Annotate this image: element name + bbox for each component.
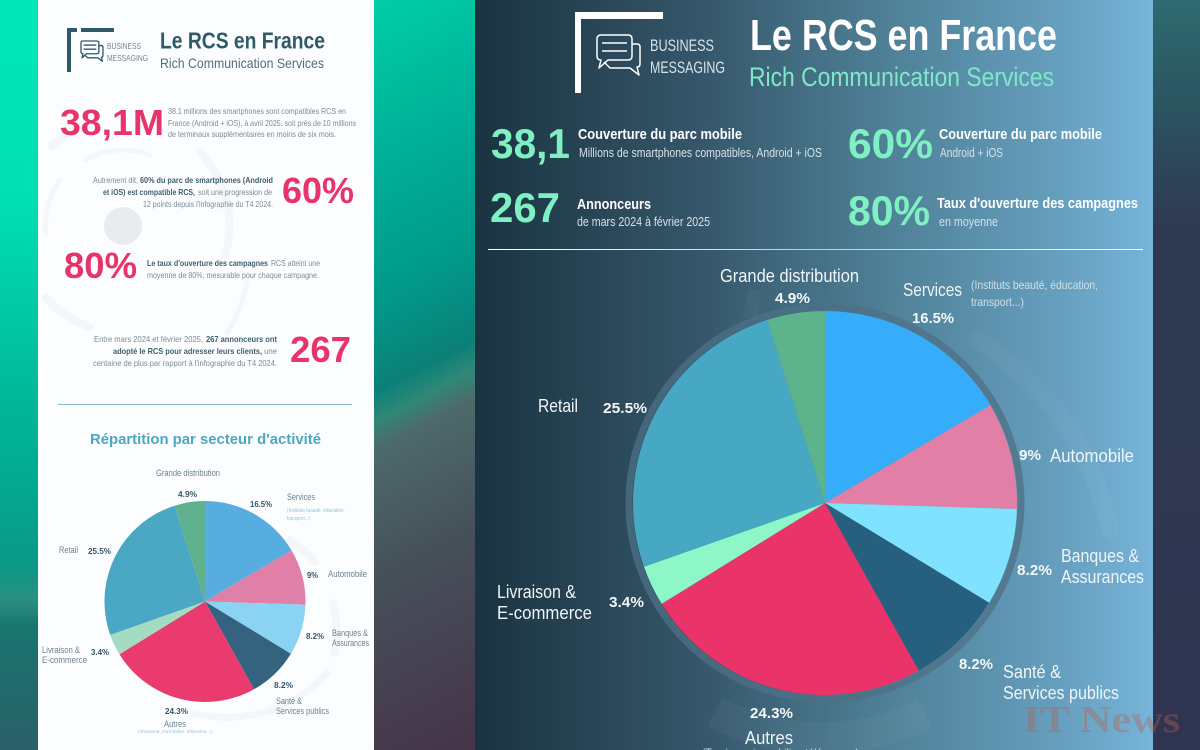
pie labels: dark version: 4.9% — [775, 290, 810, 307]
stat: 38,1M — [60, 102, 356, 143]
pie labels: dark version: Livraison & — [497, 582, 576, 602]
pie labels: light version: Automobile — [328, 569, 367, 579]
stat: 267: adopté le RCS pour adresser leurs clients, — [113, 347, 262, 356]
pie labels: light version: 25.5% — [88, 547, 111, 556]
pie labels: dark version: 9% — [1019, 447, 1041, 464]
pie labels: light version: Santé & — [276, 696, 302, 706]
pie chart: dark version — [633, 311, 1017, 695]
pie labels: dark version: Retail — [538, 396, 578, 416]
pie labels: light version: (Instituts beauté, éducation, — [287, 508, 345, 514]
stat: 38,1: Couverture du parc mobile — [578, 126, 742, 143]
pie labels: light version: 4.9% — [178, 490, 197, 499]
pie labels: light version: Services — [287, 492, 315, 502]
pie labels: dark version: Automobile — [1050, 446, 1134, 466]
stat: 267: 267 annonceurs ont — [206, 335, 277, 344]
icon: chat bubbles — [597, 35, 640, 75]
pie labels: light version: Retail — [59, 545, 78, 555]
stat: 60%: soit une progression de — [198, 188, 272, 197]
stat: 267: 267 — [490, 184, 560, 231]
pie labels: light version: Banques & — [332, 628, 368, 638]
stat: 60%: Autrement dit, — [93, 176, 138, 185]
stat: 267: Entre mars 2024 et février 2025, — [94, 335, 203, 344]
watermark: IT News: IT News — [1023, 699, 1180, 741]
decorative rings behind statistics — [46, 124, 337, 717]
panel: dark infographic — [475, 0, 1153, 750]
stat: 38,1: Millions de smartphones compatibles, Android + iOS — [579, 145, 822, 160]
pie labels: light version: 24.3% — [165, 707, 188, 716]
pie chart: light version — [105, 501, 305, 702]
panel: light infographic — [38, 0, 374, 750]
logo: business messaging: MESSAGING — [650, 58, 725, 77]
stat: 267: Annonceurs — [577, 196, 651, 213]
pie labels: dark version: 25.5% — [603, 400, 647, 417]
pie labels: light version: Autres — [164, 719, 186, 729]
stat: 267: 267 — [290, 329, 351, 370]
stat: 38,1M: 38.1 millions des smartphones sont compatibles RCS en — [168, 107, 346, 116]
pie labels: light version — [42, 468, 369, 734]
pie labels: dark version: transport...) — [971, 295, 1024, 309]
pie labels: light version: 9% — [307, 571, 318, 580]
pie labels: light version: Assurances — [332, 638, 369, 648]
stat: 80%: en moyenne — [939, 214, 998, 229]
decorative rings around pie — [629, 290, 1110, 738]
pie labels: dark version: 8.2% — [959, 656, 993, 673]
stat: 80% — [848, 187, 1138, 234]
pie labels: dark version: Banques & — [1061, 546, 1139, 566]
background strip: left — [0, 0, 39, 750]
pie labels: light version: 16.5% — [250, 500, 272, 509]
stat: 80%: 80% — [64, 245, 137, 286]
stat: 38,1M: de terminaux supplémentaires en moins de six mois. — [168, 130, 336, 139]
stat: 80%: Taux d'ouverture des campagnes — [937, 195, 1138, 212]
title: Le RCS en France — [160, 28, 325, 54]
pie labels: light version: transport...) — [287, 516, 310, 522]
stat: 60%: Couverture du parc mobile — [939, 126, 1102, 143]
pie labels: light version: Grande distribution — [156, 468, 220, 478]
stat: 60%: Android + iOS — [940, 145, 1003, 160]
stat: 80%: RCS atteint une — [271, 259, 320, 268]
pie labels: dark version: Autres — [745, 728, 793, 748]
pie labels: dark version: 8.2% — [1017, 562, 1052, 579]
pie labels: light version: (Tourisme, immobilier, télécoms...) — [138, 729, 212, 734]
stat: 38,1 — [491, 120, 822, 167]
logo: business messaging: BUSINESS — [650, 36, 714, 55]
stat: 267: centaine de plus par rapport à l'infographie du T4 2024. — [93, 359, 277, 368]
stat: 267 — [93, 329, 351, 370]
stat: 80% — [64, 245, 320, 286]
pie labels: dark version: Santé & — [1003, 662, 1061, 682]
stat: 60%: 60% du parc de smartphones (Android — [140, 176, 273, 185]
stat: 60%: 12 points depuis l'infographie du T4 2024. — [143, 200, 273, 209]
logo: business messaging — [575, 12, 725, 93]
logo: business messaging — [67, 28, 148, 72]
title: Le RCS en France — [750, 11, 1057, 60]
stat: 267 — [490, 184, 710, 231]
stat: 80%: 80% — [848, 187, 930, 234]
stat: 38,1: 38,1 — [491, 120, 570, 167]
pie labels: dark version: 3.4% — [609, 594, 644, 611]
stat: 38,1M: 38,1M — [60, 102, 164, 143]
pie labels: dark version: Services — [903, 280, 962, 300]
pie labels: light version: 8.2% — [274, 681, 293, 690]
pie labels: dark version — [497, 266, 1144, 750]
pie labels: light version: Livraison & — [42, 645, 80, 655]
pie labels: light version: E-commerce — [42, 655, 87, 665]
stat: 60%: et iOS) est compatible RCS, — [103, 188, 195, 197]
stat: 60% — [848, 120, 1102, 167]
logo: business messaging: BUSINESS — [107, 41, 141, 51]
background strip: centre — [374, 0, 476, 750]
pie labels: light version: 3.4% — [91, 648, 109, 657]
pie labels: dark version: 16.5% — [912, 310, 954, 327]
stat: 80%: Le taux d'ouverture des campagnes — [147, 259, 268, 268]
pie labels: dark version: 24.3% — [750, 705, 793, 722]
pie labels: dark version: E-commerce — [497, 603, 592, 623]
subtitle: Rich Communication Services — [749, 62, 1054, 92]
stat: 60% — [93, 170, 354, 211]
logo: business messaging: MESSAGING — [107, 53, 148, 63]
pie labels: light version: 8.2% — [306, 632, 324, 641]
pie labels: dark version: (Instituts beauté, éducation, — [971, 278, 1098, 292]
pie labels: dark version: Assurances — [1061, 567, 1144, 587]
background strip: right — [1153, 0, 1200, 750]
stat: 80%: moyenne de 80%, mesurable pour chaque campagne. — [147, 271, 319, 280]
subtitle: Rich Communication Services — [160, 55, 324, 71]
stat: 267: de mars 2024 à février 2025 — [577, 214, 710, 229]
pie labels: light version: Services publics — [276, 706, 329, 716]
stat: 267: une — [264, 347, 277, 356]
pie labels: dark version: Services publics — [1003, 683, 1119, 703]
stat: 60%: 60% — [282, 170, 354, 211]
heading: sector breakdown: Répartition par secteur d'activité — [90, 431, 321, 448]
stat: 60%: 60% — [848, 120, 933, 167]
pie labels: dark version: Grande distribution — [720, 266, 859, 286]
stat: 38,1M: France (Android + iOS), à avril 2025, soit près de 10 millions — [168, 119, 356, 128]
